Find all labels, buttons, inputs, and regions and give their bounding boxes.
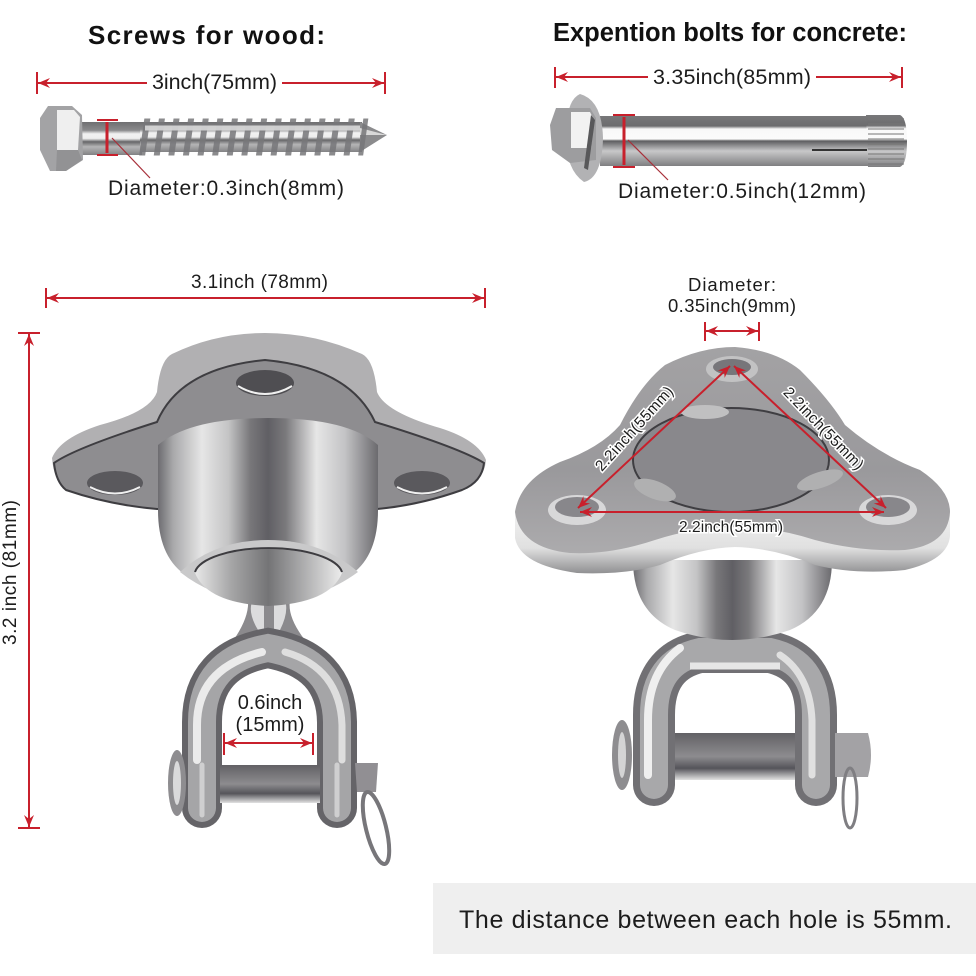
dimension: width: 3.1inch (78mm) <box>191 272 328 293</box>
dimension: shackle opening: (15mm) <box>236 714 304 736</box>
icon: swivel cup and ball <box>158 418 378 606</box>
dimension: shackle opening <box>224 692 313 755</box>
panel: screw for wood <box>37 20 387 200</box>
icon: ball housing <box>633 560 832 640</box>
icon: wood screw <box>40 106 387 171</box>
icon: shackle <box>168 598 395 866</box>
panel: expansion bolt for concrete <box>550 19 907 203</box>
panel: hook top view <box>515 274 950 828</box>
triangle dimension arrows <box>578 366 886 536</box>
icon: mounting plate <box>52 333 486 509</box>
dimension: hole diameter <box>668 274 796 341</box>
dimension: bolt length <box>555 65 902 89</box>
heading: screws: Screws for wood: <box>88 20 325 50</box>
icon: triangular plate <box>515 347 950 573</box>
dimension: screw diameter: Diameter:0.3inch(8mm) <box>108 177 344 200</box>
triangle dimension arrows: 2.2inch(55mm) <box>780 384 867 474</box>
callout: hole distance note: The distance between each hole is 55mm. <box>459 906 952 934</box>
dimension: height <box>0 333 40 828</box>
dimension: shackle opening: 0.6inch <box>238 692 302 714</box>
panel: hook side view <box>0 272 486 866</box>
dimension: height: 3.2 inch (81mm) <box>0 500 21 645</box>
icon: shackle and pin <box>612 648 871 828</box>
dimension: width <box>46 272 485 308</box>
dimension: screw diameter <box>97 120 344 200</box>
dimension: bolt diameter <box>613 115 866 203</box>
dimension: hole diameter: Diameter: <box>688 274 776 295</box>
heading: bolts: Expention bolts for concrete: <box>553 19 907 47</box>
dimension: bolt diameter: Diameter:0.5inch(12mm) <box>618 180 866 203</box>
dimension: bolt length: 3.35inch(85mm) <box>653 65 811 89</box>
dimension: screw length: 3inch(75mm) <box>152 70 277 94</box>
dimension: hole diameter: 0.35inch(9mm) <box>668 295 796 316</box>
dimension: screw length <box>37 70 385 94</box>
callout: hole distance note <box>433 883 976 954</box>
triangle dimension arrows: 2.2inch(55mm) <box>679 519 783 536</box>
icon: expansion bolt <box>550 94 907 182</box>
triangle dimension arrows: 2.2inch(55mm) <box>592 383 677 475</box>
